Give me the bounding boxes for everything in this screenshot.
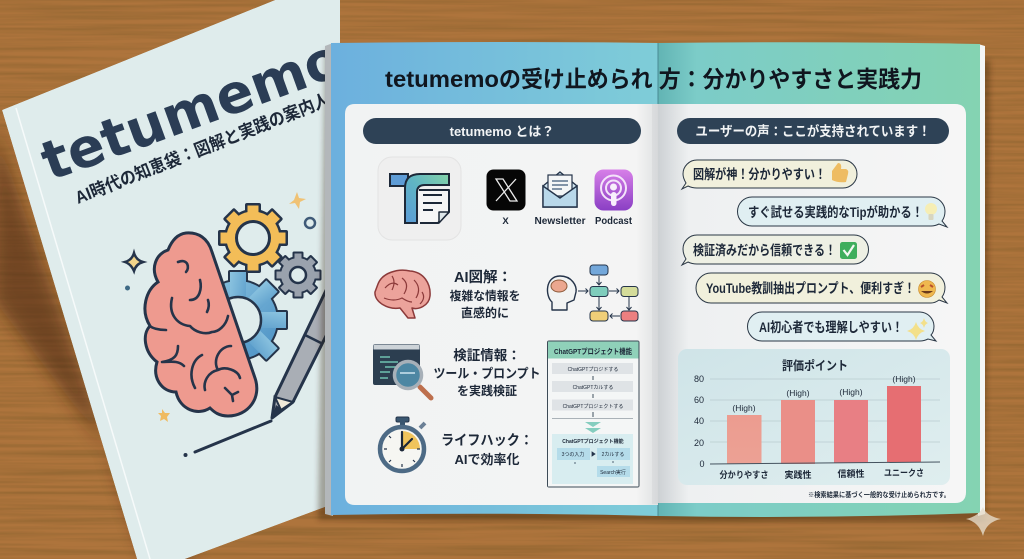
sparkle: yellow bottom xyxy=(158,409,170,422)
bar 4: (High) xyxy=(892,374,916,384)
icon: grey gear xyxy=(274,252,322,298)
chart: evaluation points xyxy=(678,349,950,485)
icon: blue gear xyxy=(224,270,288,362)
text: AI図解 xyxy=(450,269,520,320)
right page edge xyxy=(978,44,985,516)
diagram: flow chart xyxy=(547,265,638,321)
lower block xyxy=(552,434,633,484)
x axis labels xyxy=(720,468,924,480)
label: X: X xyxy=(502,216,509,227)
icon: yellow gear xyxy=(218,203,288,273)
left page edge xyxy=(325,43,333,516)
chart title: 評価ポイント xyxy=(782,358,848,373)
icon: star-eyes face xyxy=(918,280,936,298)
text: AI図解: 直感的に xyxy=(461,305,509,320)
speech bubble 4: YouTube教訓抽出プロンプト、便利すぎ！ xyxy=(706,280,915,296)
text: 検証情報 xyxy=(434,347,540,398)
chart background xyxy=(678,349,950,485)
icon: stopwatch xyxy=(380,417,425,471)
right cover page xyxy=(658,42,980,517)
section heading: tetumemo とは xyxy=(363,118,641,144)
x axis labels: 信頼性 xyxy=(837,468,865,479)
icon: sparkles xyxy=(907,318,928,340)
y axis labels: 80 xyxy=(694,374,704,384)
flow arrows xyxy=(578,276,632,318)
step arrows xyxy=(592,376,594,417)
title: tetumemo xyxy=(385,66,499,92)
open book xyxy=(325,42,985,517)
step boxes: ChatGPTプロジドする xyxy=(568,367,618,373)
panel header: ChatGPTプロジェクト機能 xyxy=(554,346,632,356)
panel: left page xyxy=(345,104,658,505)
down chevron xyxy=(585,422,601,433)
speech bubble 3: 検証済みだから信頼できる！ xyxy=(693,242,836,258)
speech bubble 2 xyxy=(738,197,947,227)
icon: thumbs up xyxy=(832,163,848,182)
section heading: user voices xyxy=(677,118,949,144)
bar 3: (High) xyxy=(839,387,863,397)
panel: ChatGPT project diagram xyxy=(548,341,639,487)
x axis labels: ユニークさ xyxy=(884,468,924,478)
text: 検証情報: ツール・プロンプト xyxy=(434,366,540,381)
chart baseline xyxy=(710,462,940,464)
step boxes: ChatGPTカルする xyxy=(573,385,613,391)
left cover page xyxy=(331,42,658,516)
text: 検証情報: 検証情報： xyxy=(453,347,521,363)
sparkle: navy xyxy=(125,253,143,271)
spine shadow xyxy=(652,104,658,504)
sparkle: yellow top xyxy=(289,192,306,209)
icon: code window and magnifier xyxy=(373,344,431,398)
head with brain xyxy=(547,276,576,310)
cover title: tetumemo xyxy=(33,26,350,193)
bar 2: (High) xyxy=(786,388,810,398)
lower block: 2カルする xyxy=(602,452,624,458)
section heading: user voices: ユーザーの声：ここが支持されています！ xyxy=(696,123,930,139)
text: ライフハック: ライフハック： xyxy=(441,432,533,448)
icon: podcast xyxy=(594,170,633,210)
bar 3 xyxy=(834,387,868,463)
icon: light bulb xyxy=(925,203,937,220)
lower block: ChatGPTプロジェクト機能 xyxy=(562,438,624,445)
lower block: 3つの入力 xyxy=(562,451,584,458)
icon: app logo xyxy=(378,157,461,240)
icon: pencil xyxy=(270,289,325,420)
pen stroke line xyxy=(195,421,271,452)
lower block: Search実行 xyxy=(600,469,626,476)
step boxes xyxy=(552,363,633,410)
book cover xyxy=(2,0,350,559)
text: ライフハック xyxy=(441,432,533,467)
bar 1: (High) xyxy=(732,403,756,413)
speech bubble 4 xyxy=(696,273,947,303)
text: AI図解: AI図解： xyxy=(454,269,512,286)
x axis labels: 分かりやすさ xyxy=(720,469,768,480)
text: ライフハック: AIで効率化 xyxy=(454,452,520,467)
panel header xyxy=(548,342,638,358)
spine line xyxy=(657,43,659,516)
x axis labels: 実践性 xyxy=(784,469,812,480)
flow boxes xyxy=(590,265,638,321)
label: Newsletter: Newsletter xyxy=(534,216,586,227)
text: 検証情報: を実践検証 xyxy=(457,383,517,398)
speech bubble 2: すぐ試せる実践的なTipが助かる！ xyxy=(748,204,923,220)
text: AI図解: 複雑な情報を xyxy=(450,289,520,303)
y axis labels xyxy=(694,374,705,469)
bar 4 xyxy=(887,374,921,462)
speech bubble 3 xyxy=(682,235,868,265)
pen stroke dot xyxy=(184,453,188,457)
y axis labels: 40 xyxy=(694,416,704,426)
title: の受け止められ 方：分かりやすさと実践力 xyxy=(499,66,922,92)
grid lines xyxy=(710,379,940,442)
speech bubble 1: 図解が神！分かりやすい！ xyxy=(693,166,826,182)
illustration: brain xyxy=(145,233,257,416)
cover spine crease xyxy=(16,108,150,559)
cover subtitle: AI時代の知恵袋：図解と実践の案内人 xyxy=(72,89,333,208)
speech bubble 5: AI初心者でも理解しやすい！ xyxy=(759,319,903,335)
icon: check mark xyxy=(840,242,857,259)
icon: corner sparkle xyxy=(966,507,1001,536)
ring decoration xyxy=(305,218,315,228)
section heading: tetumemo とは: tetumemo とは？ xyxy=(450,124,554,139)
y axis labels: 60 xyxy=(694,395,704,405)
cover shadow xyxy=(0,125,200,559)
icon: newsletter envelope xyxy=(543,172,577,207)
speech bubble 1 xyxy=(682,160,857,189)
y axis labels: 0 xyxy=(699,459,705,469)
footnote: ※検索結果に基づく一般的な受け止められ方です。 xyxy=(808,490,950,499)
y axis labels: 20 xyxy=(694,438,704,448)
cover paper xyxy=(2,0,340,559)
panel: right page xyxy=(658,104,966,503)
icon: brain xyxy=(375,270,430,318)
bar 2 xyxy=(781,388,815,464)
bar 1 xyxy=(727,403,762,464)
icon: X xyxy=(486,170,526,210)
speech bubble 5 xyxy=(748,312,936,341)
book shadow xyxy=(318,50,990,522)
step boxes: ChatGPTプロジェクトする xyxy=(563,404,623,410)
dot decoration xyxy=(125,286,130,290)
label: Podcast: Podcast xyxy=(595,216,633,227)
